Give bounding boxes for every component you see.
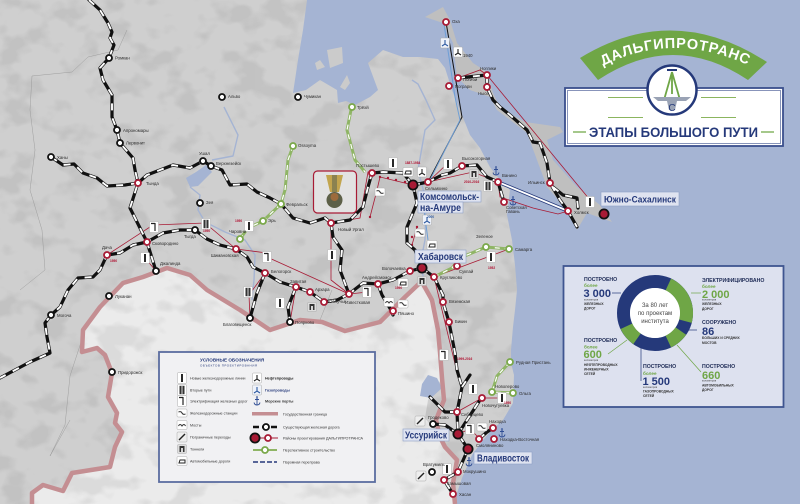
station labels: Могоча [57,313,72,318]
stat: oil pipelines: 600 [584,349,602,361]
stat: roads: ДОРОГ [702,388,714,392]
stat: electrified: ДОРОГ [702,307,714,311]
station labels: Кругликово [440,275,463,280]
lakes and rivers [20,30,442,456]
legend left column: Автомобильные дороги [190,460,230,464]
stat: gas pipelines: ГАЗОПРОВОДНЫХ [643,390,674,394]
donut center text: института [641,319,669,325]
station labels: Смоляниново [476,443,504,448]
station labels: Погиби [463,77,478,82]
station labels: Зея [206,200,214,205]
station labels: Трёхй [357,105,369,110]
station labels: Советская [506,205,527,210]
legend panel [159,352,375,482]
station labels: 1950 [110,259,117,263]
stat: railways built: ДОРОГ [584,306,596,310]
logo emblem [648,66,696,114]
stat: oil pipelines: НЕФТЕПРОВОДНЫХ [584,363,618,367]
station labels: Высокогорная [462,156,491,161]
legend right column: Газопроводы [265,388,290,392]
station labels: 2010-2016 [464,180,479,184]
station labels: Ноглики [480,66,497,71]
station labels: 1999-2016 [457,357,472,361]
station labels: Дача [102,245,112,250]
station labels: 1940 [463,53,473,58]
stat: electrified: ЖЕЛЕЗНЫХ [701,302,722,306]
station labels: Сковородино [152,241,179,246]
legend left column: Электрификация железных дорог [190,400,248,404]
stat: gas pipelines: более [643,370,657,376]
station labels: 2000 [427,215,434,219]
stat: oil pipelines: ИНЖЕНЕРНЫХ [584,368,609,372]
stat: bridges: СООРУЖЕНО [702,320,736,326]
stat: gas pipelines: ПОСТРОЕНО [643,364,676,370]
projected green lines [240,105,513,393]
station labels: Самарга [515,247,533,252]
ferry crossing [498,182,568,211]
station labels: Ромкан [115,56,130,60]
city label: komsomolsk: Комсомольск- [420,192,479,203]
station labels: Бикин [455,319,468,324]
stat: electrified: ЭЛЕКТРИФИЦИРОВАНО [702,278,764,284]
legend left column: Тоннели [190,448,204,452]
station labels: Постышево [356,163,380,168]
design region red lines [107,70,590,480]
stat: roads [702,364,735,392]
legend right column: Паромная переправа [283,460,321,464]
station labels: 1887-1984 [405,161,420,165]
stat: roads: АВТОМОБИЛЬНЫХ [702,384,734,388]
station labels: Новый Ургал [338,227,364,232]
station labels: Андрейсмомск [362,275,392,280]
legend right column [250,373,364,464]
stat: electrified: километров [702,298,717,302]
station labels: Новолерово [495,384,520,389]
stat: railways built: ЖЕЛЕЗНЫХ [583,302,604,306]
stat: railways built: более [584,282,598,288]
stat: railways built [583,277,617,310]
stat: bridges [702,320,740,345]
station labels: Ханы [57,155,68,160]
legend left column [177,372,248,466]
station labels: 1950 [235,219,242,223]
station labels: Находка-Восточная [500,437,540,442]
stat: roads: километров [702,380,717,382]
stat: oil pipelines: ПОСТРОЕНО [584,338,617,344]
station labels: Зеленое [476,234,494,239]
legend left column: Пограничные переходы [190,436,231,440]
stat: oil pipelines: более [584,344,598,350]
station labels: Вяземская [449,299,471,304]
stat: roads: ПОСТРОЕНО [702,364,735,370]
stat: electrified: 2 000 [702,289,730,301]
title panel [564,30,784,147]
station labels: 1950 [395,286,402,290]
station labels: Пяшино [398,311,415,316]
station labels: Нысе [478,91,489,96]
city label: vladivostok: Владивосток [477,454,530,464]
stat: gas pipelines [642,364,676,398]
station labels: Луканан [115,294,132,299]
station labels: Ильинск [528,180,545,185]
station labels: Волочаевка [382,266,406,271]
legend right column: Существующая железная дорога [283,426,341,430]
station labels: Белогорск [271,269,291,274]
border [32,268,457,504]
station labels: Архара [315,287,330,292]
station labels: Верхнезейск [216,161,241,166]
donut center text: За 80 лет [642,303,668,309]
station labels: Февральск [286,202,308,207]
station labels: Альво [228,94,241,99]
city label: komsomolsk [418,191,481,214]
green arc banner [580,30,767,80]
station labels: Вратумиль [423,462,446,467]
station labels: Хасан [459,492,472,497]
legend left column: Мосты [190,424,202,428]
legend right column: Перспективное строительство [283,448,335,452]
logo emblem: С [668,103,676,114]
station labels: Лервонит [126,140,145,146]
station labels: Камышовая [447,481,471,486]
main title: ЭТАПЫ БОЛЬШОГО ПУТИ [589,124,758,140]
station labels: 1952 [488,266,495,270]
station labels: 1950 [504,401,511,405]
stat: electrified [701,278,764,311]
station labels: Эрь [268,218,276,223]
station labels: Тыгда [184,234,196,239]
station labels: Сельмхино [425,186,448,191]
station labels: Чаровни [229,229,247,234]
stations [48,19,609,497]
station labels: Ванино [502,173,517,178]
station labels: Находка [489,419,506,424]
station labels: Сукпай [459,269,474,274]
station labels: Холмск [574,210,589,215]
stat: roads: 660 [702,370,720,382]
stat: railways built: километров [584,298,599,302]
station labels: Джалинда [160,261,181,266]
donut center text: по проектам [638,311,672,317]
station labels: Мокрушино [463,469,487,474]
station labels: 1950 [203,229,210,233]
stat: bridges: 86 [702,326,714,338]
gas and oil pipelines [424,22,462,240]
station labels: Известковая [345,300,371,305]
white title box [565,88,783,146]
legend left column: Вторые пути [190,388,211,392]
station labels [57,19,589,497]
station labels: Ольга [519,391,532,396]
station labels: Пограри [455,84,472,89]
mainland [0,0,517,504]
legend right column: Районы проектирования ДАЛЬГИПРОТРАНСА [283,436,364,440]
station labels: Рудная Пристань [516,360,551,365]
station labels: Оха [452,19,460,24]
stat: bridges: БОЛЬШИХ И СРЕДНИХ [702,336,740,340]
donut chart [624,282,686,344]
city label: khabarovsk: Хабаровск [418,251,464,263]
station labels: Гродеково [428,415,449,420]
stat: oil pipelines: километров [584,359,599,362]
stat: oil pipelines: СЕТЕЙ [584,372,596,376]
infrastructure icons [140,38,594,481]
medal box [314,171,356,213]
sakhalin island [425,7,612,230]
station labels: Придорожск [118,370,143,375]
station labels: Благовещенск [223,322,252,327]
stat: gas pipelines: СЕТЕЙ [643,394,655,398]
legend right column: Морские порты [265,400,293,404]
station labels: Апрономары [123,128,149,133]
station labels: Завитая [290,279,307,284]
city label: ussuriysk: Уссурийск [405,430,448,442]
legend right column: Государственная граница [283,412,328,416]
station labels: Ушал [199,151,210,156]
legend title [200,358,264,368]
station labels: Облучье [329,299,347,304]
station labels: Поярково [295,320,315,325]
station labels: Тында [146,181,159,186]
station labels: Чумикан [304,94,322,99]
stat: gas pipelines: километров [643,386,658,389]
existing railways [0,0,578,494]
legend title: УСЛОВНЫЕ ОБОЗНАЧЕНИЯ [200,358,264,362]
city label: yuzhno-sakhalinsk: Южно-Сахалинск [604,194,676,206]
stat: electrified: более [702,283,716,289]
city label: komsomolsk: на-Амуре [420,203,461,214]
stat: railways built: ПОСТРОЕНО [584,277,617,283]
green arc banner: ДАЛЬГИПРОТРАНС [602,38,750,68]
stat: railways built: 3 000 [584,288,611,300]
station labels: Шимановская [211,253,239,258]
legend title: ОБЪЕКТОВ ПРОЕКТИРОВАНИЯ [200,364,258,368]
legend left column: Новые железнодорожные линии [190,376,245,380]
legend left column: Железнодорожные станции [190,412,237,416]
shantar islands [315,47,350,90]
leader lines [608,293,701,381]
stats panel [564,266,784,407]
station labels: Сибирцево [461,412,484,417]
donut center text [638,303,672,325]
china territory [32,268,457,504]
station labels: Ossoyma [298,143,317,148]
stat: gas pipelines: 1 500 [642,376,670,388]
stat: bridges: МОСТОВ [702,341,717,345]
relief texture [0,0,520,504]
stat: oil pipelines [584,338,618,376]
station labels: Новочугуевка [482,403,510,408]
legend right column: Нефтепроводы [265,376,293,380]
station labels: Гавань [506,209,520,214]
green rules [608,98,736,118]
